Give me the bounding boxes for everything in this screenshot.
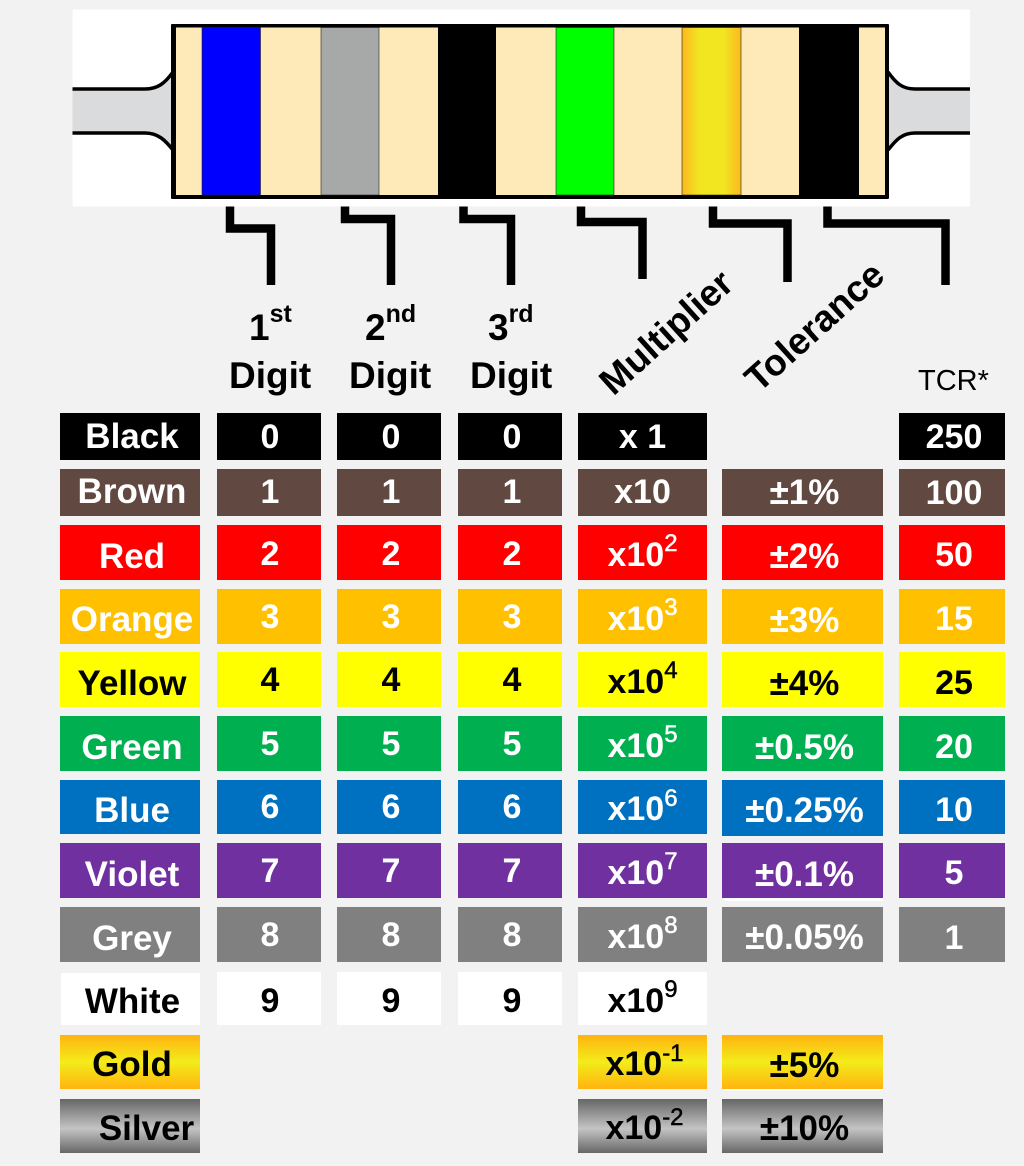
multiplier silver	[578, 1099, 707, 1153]
tolerance green	[722, 716, 883, 771]
tcr blue: 10	[935, 790, 973, 828]
connector: 1st digit	[230, 206, 271, 285]
2nd digit green	[337, 716, 441, 771]
tcr green: 20	[935, 728, 973, 766]
multiplier black	[578, 413, 707, 460]
multiplier black: x 1	[619, 418, 666, 456]
resistor body outline	[171, 24, 889, 199]
heading: tcr: TCR*	[918, 365, 989, 397]
1st digit yellow	[217, 652, 321, 707]
connector: 2nd digit	[345, 206, 391, 285]
label: yellow: Yellow	[78, 664, 186, 702]
2nd digit brown: 1	[382, 472, 400, 510]
3rd digit yellow: 4	[503, 660, 521, 698]
multiplier gold	[578, 1035, 707, 1089]
connector: multiplier	[581, 206, 642, 279]
3rd digit green: 5	[503, 724, 521, 762]
2nd digit blue: 6	[382, 788, 400, 826]
tcr yellow: 25	[935, 664, 973, 702]
1st digit violet	[217, 843, 321, 898]
2nd digit red	[337, 525, 441, 580]
3rd digit blue: 6	[503, 788, 521, 826]
band: black tcr	[799, 28, 859, 195]
1st digit white: 9	[261, 982, 279, 1020]
multiplier brown	[578, 469, 707, 516]
label: silver	[60, 1099, 200, 1153]
2nd digit grey: 8	[382, 916, 400, 954]
multiplier grey: x108	[607, 912, 678, 956]
2nd digit brown	[337, 469, 441, 516]
1st digit red: 2	[261, 534, 279, 572]
label: red: Red	[99, 536, 165, 576]
label: red	[60, 525, 200, 580]
heading: multiplier: Multiplier	[591, 262, 741, 403]
2nd digit blue	[337, 780, 441, 834]
label: white	[61, 973, 200, 1025]
2nd digit white	[337, 972, 441, 1025]
multiplier violet	[578, 843, 707, 898]
connector: tcr	[828, 206, 946, 285]
2nd digit red: 2	[382, 534, 400, 572]
label: green: Green	[81, 728, 183, 766]
1st digit brown	[217, 469, 321, 516]
tcr violet: 5	[945, 854, 963, 892]
label: gold	[60, 1035, 200, 1089]
tolerance silver	[722, 1099, 883, 1153]
label: yellow	[60, 652, 200, 707]
1st digit violet: 7	[261, 852, 279, 890]
heading: 3rd digit: 3rd	[488, 300, 534, 348]
3rd digit violet: 7	[503, 852, 521, 890]
colour code table	[60, 413, 1005, 1153]
2nd digit violet: 7	[382, 852, 400, 890]
connector: 3rd digit	[464, 206, 511, 285]
3rd digit red	[458, 525, 562, 580]
tcr green	[899, 716, 1005, 771]
1st digit white	[217, 972, 321, 1025]
2nd digit yellow	[337, 652, 441, 707]
heading: 2nd digit word: Digit	[349, 355, 431, 396]
label: white: White	[85, 982, 180, 1021]
tolerance grey: ±0.05%	[745, 918, 864, 956]
tcr black	[899, 413, 1005, 460]
3rd digit orange	[458, 589, 562, 644]
tcr grey	[899, 907, 1005, 962]
band: blue	[202, 28, 260, 195]
1st digit orange: 3	[261, 598, 279, 636]
multiplier green: x105	[607, 721, 678, 764]
band: grey	[321, 28, 379, 195]
label: black: Black	[85, 417, 179, 456]
multiplier blue: x106	[607, 785, 678, 828]
tolerance grey	[722, 907, 883, 962]
multiplier green	[578, 716, 707, 771]
tcr grey: 1	[945, 919, 963, 957]
1st digit brown: 1	[261, 472, 279, 510]
heading: 1st digit word: Digit	[229, 355, 311, 396]
tolerance violet	[722, 843, 883, 898]
resistor diagram	[72, 10, 970, 285]
multiplier red: x102	[607, 530, 678, 574]
1st digit blue: 6	[261, 788, 279, 826]
multiplier violet: x107	[607, 848, 678, 892]
label: violet: Violet	[85, 854, 179, 894]
1st digit black: 0	[261, 418, 279, 456]
tcr red: 50	[935, 536, 973, 574]
multiplier silver: x10-2	[605, 1104, 684, 1147]
label: grey: Grey	[92, 918, 172, 958]
label: grey	[60, 907, 200, 962]
1st digit orange	[217, 589, 321, 644]
2nd digit orange: 3	[382, 598, 400, 636]
tolerance red	[722, 525, 883, 580]
2nd digit black	[337, 413, 441, 460]
tolerance yellow	[722, 652, 883, 707]
1st digit green	[217, 716, 321, 771]
tcr black: 250	[926, 418, 982, 456]
3rd digit blue	[458, 780, 562, 834]
multiplier brown: x10	[614, 472, 671, 510]
2nd digit yellow: 4	[382, 660, 400, 698]
resistor white panel	[72, 10, 970, 206]
multiplier white	[578, 972, 707, 1025]
1st digit black	[217, 413, 321, 460]
3rd digit brown: 1	[503, 472, 521, 510]
label: gold: Gold	[92, 1045, 172, 1084]
tolerance orange	[722, 589, 883, 644]
label: green	[60, 716, 200, 771]
left lead wire	[72, 72, 173, 150]
2nd digit violet	[337, 843, 441, 898]
tcr orange: 15	[935, 600, 973, 638]
3rd digit red: 2	[503, 534, 521, 572]
1st digit grey	[217, 907, 321, 962]
2nd digit white: 9	[382, 982, 400, 1020]
connector: tolerance	[713, 206, 788, 282]
tcr yellow	[899, 652, 1005, 707]
multiplier gold: x10-1	[605, 1040, 684, 1083]
resistor body fill	[176, 28, 885, 195]
3rd digit white	[458, 972, 562, 1025]
2nd digit black: 0	[382, 418, 400, 456]
3rd digit grey	[458, 907, 562, 962]
tolerance blue: ±0.25%	[745, 791, 864, 830]
3rd digit brown	[458, 469, 562, 516]
3rd digit grey: 8	[503, 916, 521, 954]
right lead wire	[888, 72, 970, 150]
2nd digit orange	[337, 589, 441, 644]
heading: 1st digit: 1st	[249, 300, 292, 348]
label: orange: Orange	[71, 600, 193, 638]
tolerance silver: ±10%	[760, 1109, 849, 1148]
multiplier orange	[578, 589, 707, 644]
tolerance orange: ±3%	[770, 600, 839, 640]
multiplier blue	[578, 780, 707, 834]
left lead outline	[72, 72, 173, 150]
1st digit yellow: 4	[261, 660, 279, 698]
3rd digit orange: 3	[503, 598, 521, 636]
3rd digit yellow	[458, 652, 562, 707]
1st digit grey: 8	[261, 916, 279, 954]
right lead outline	[888, 72, 970, 150]
multiplier orange: x103	[607, 594, 678, 638]
tolerance blue	[722, 780, 883, 836]
band: black	[438, 28, 496, 195]
tolerance brown: ±1%	[770, 473, 839, 512]
3rd digit violet	[458, 843, 562, 898]
band: green	[556, 28, 614, 195]
2nd digit green: 5	[382, 724, 400, 762]
tolerance brown	[722, 469, 883, 516]
1st digit blue	[217, 780, 321, 834]
label: silver: Silver	[99, 1109, 194, 1148]
1st digit green: 5	[261, 724, 279, 762]
heading: 3rd digit word: Digit	[470, 355, 552, 396]
multiplier red	[578, 525, 707, 580]
tolerance yellow: ±4%	[770, 664, 839, 702]
label: blue	[60, 780, 200, 834]
heading: tolerance: Tolerance	[737, 254, 892, 399]
tcr brown: 100	[926, 474, 982, 512]
3rd digit black: 0	[503, 418, 521, 456]
label: orange	[60, 589, 200, 644]
label: brown	[60, 469, 200, 516]
multiplier yellow: x104	[607, 657, 678, 700]
heading: 2nd digit: 2nd	[365, 300, 416, 348]
3rd digit green	[458, 716, 562, 771]
label: violet	[60, 843, 200, 898]
band: gold	[682, 28, 741, 195]
1st digit red	[217, 525, 321, 580]
multiplier grey	[578, 907, 707, 962]
3rd digit black	[458, 413, 562, 460]
tolerance gold: ±5%	[770, 1046, 839, 1085]
multiplier yellow	[578, 652, 707, 707]
multiplier white: x109	[607, 976, 678, 1020]
tcr blue	[899, 780, 1005, 834]
tolerance red: ±2%	[770, 536, 839, 576]
tcr orange	[899, 589, 1005, 644]
3rd digit white: 9	[503, 982, 521, 1020]
tolerance green: ±0.5%	[755, 728, 854, 766]
tolerance violet: ±0.1%	[755, 854, 854, 894]
tcr violet	[899, 843, 1005, 898]
label: brown: Brown	[78, 472, 186, 511]
tcr red	[899, 525, 1005, 580]
label: black	[60, 413, 200, 460]
tolerance gold	[722, 1035, 883, 1089]
2nd digit grey	[337, 907, 441, 962]
tcr brown	[899, 469, 1005, 516]
label: blue: Blue	[94, 791, 170, 830]
